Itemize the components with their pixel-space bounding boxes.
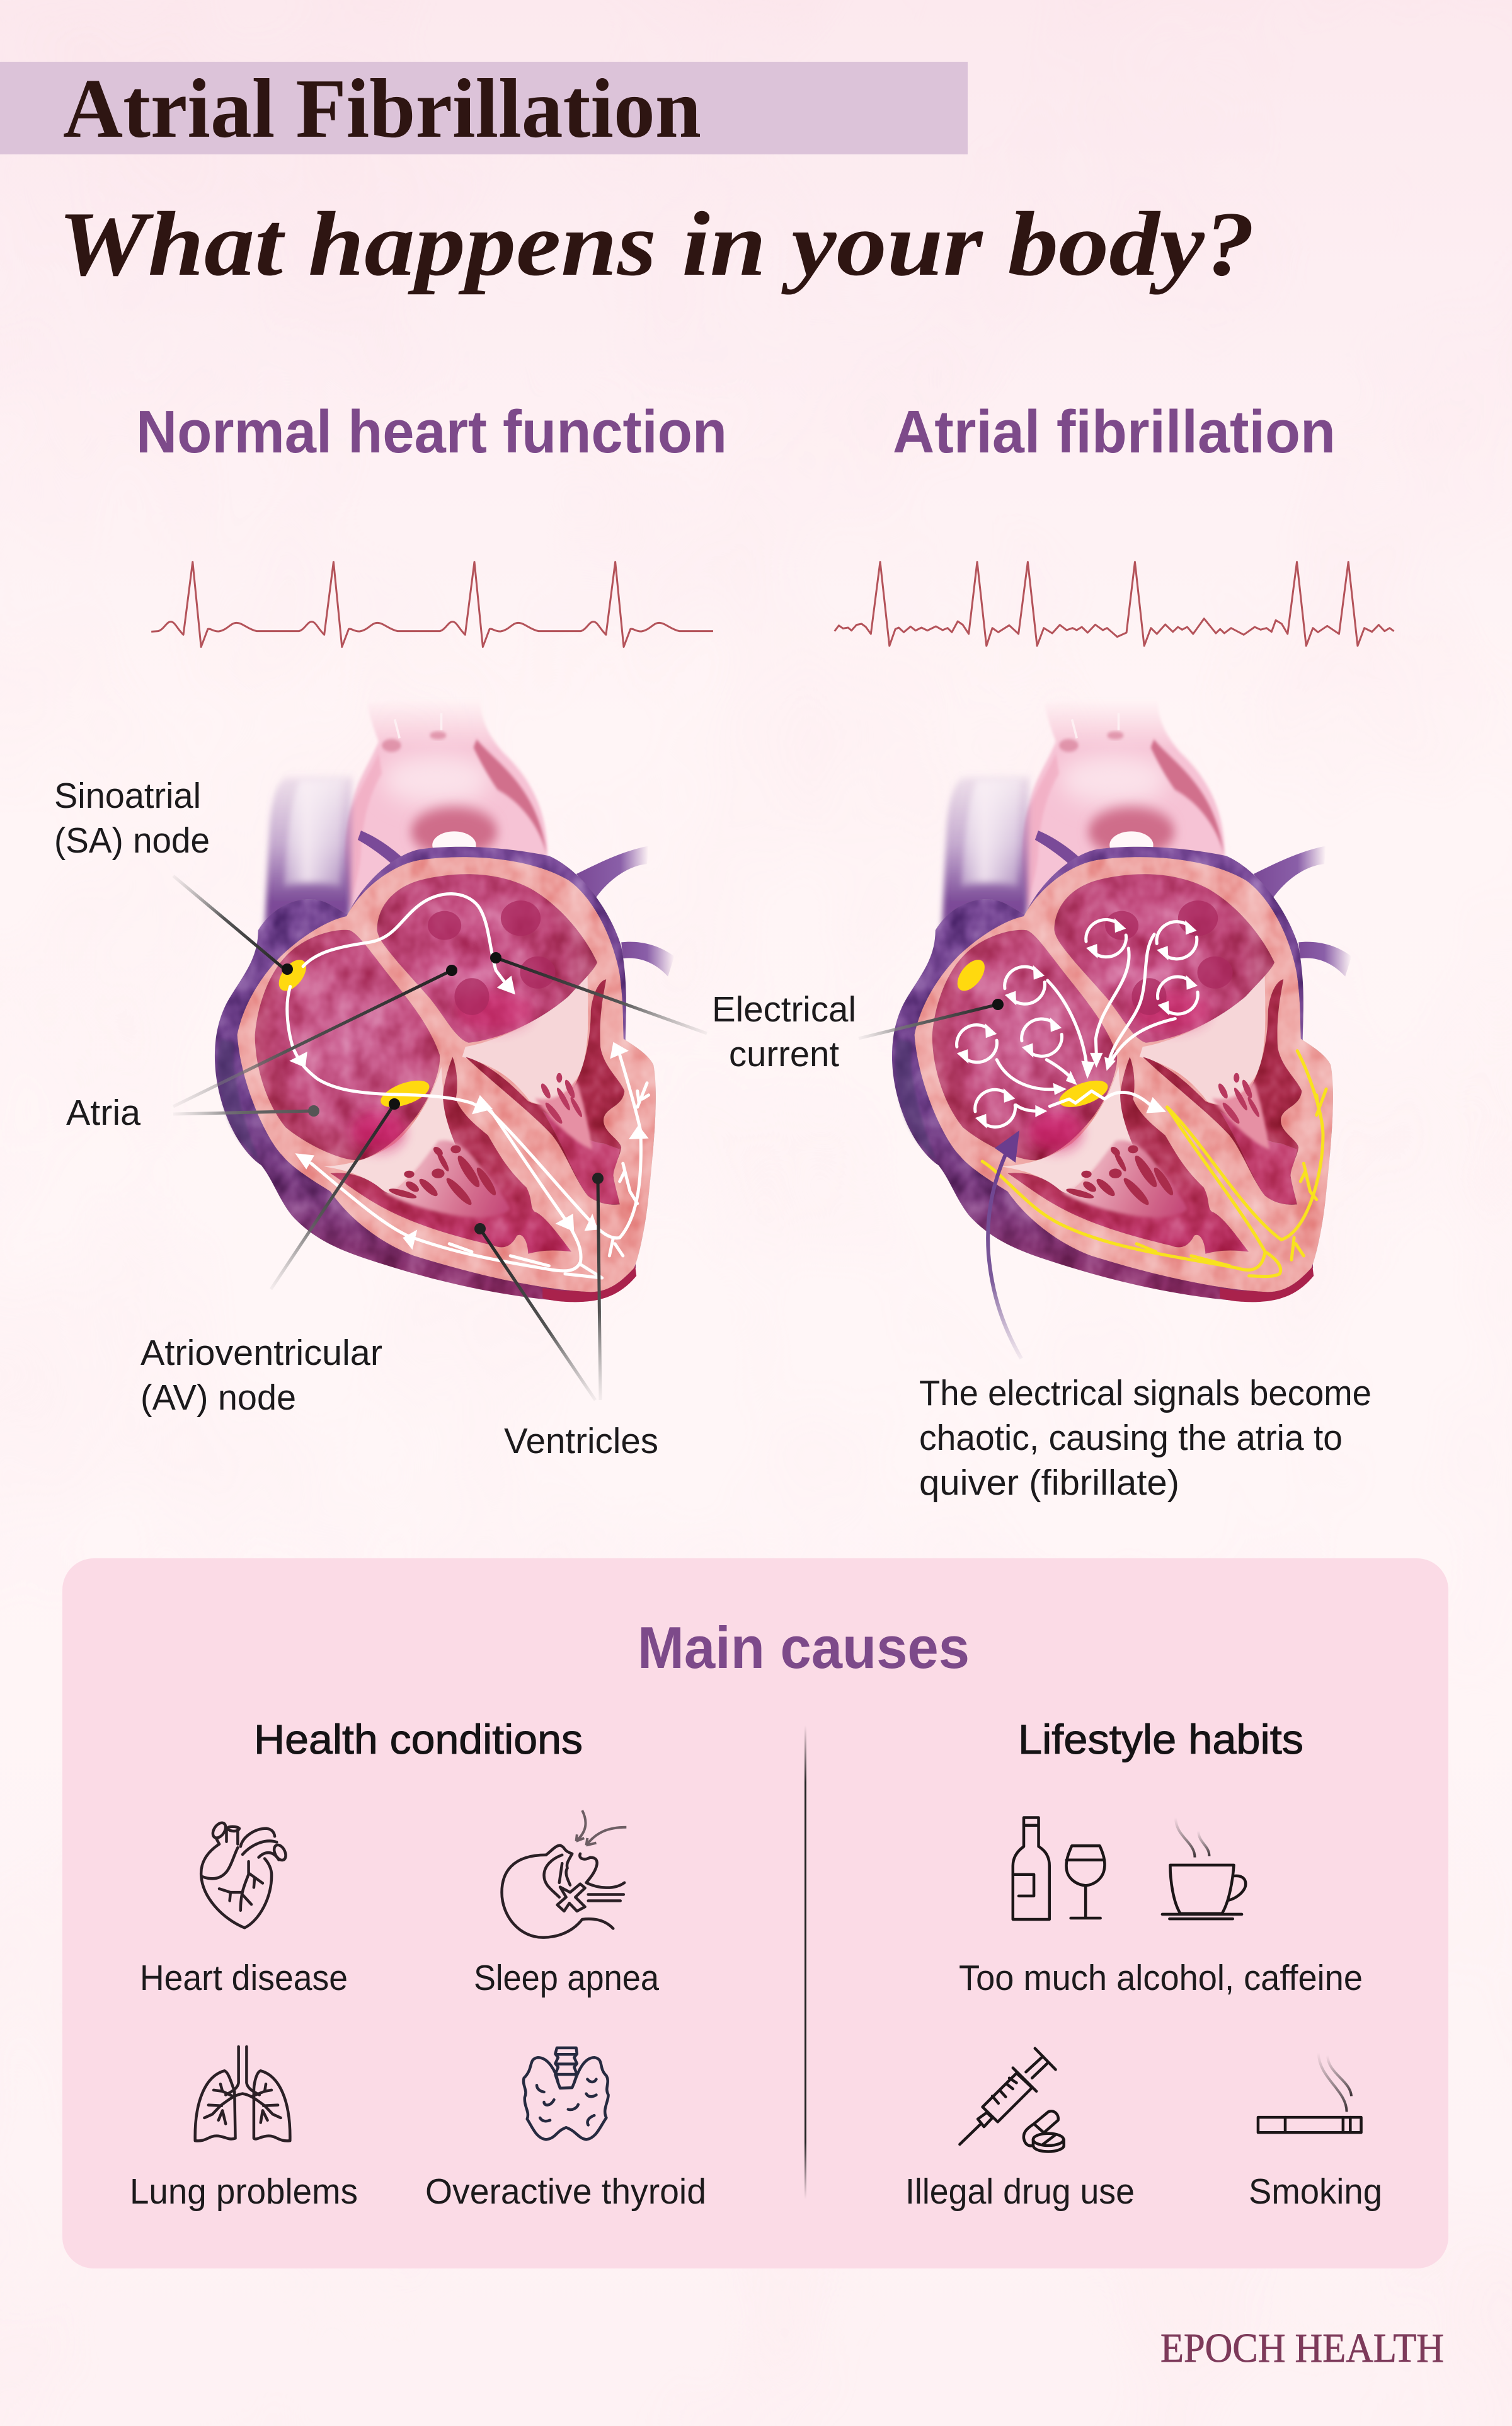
label: alcohol, caffeine: Too much alcohol, caffeine [959,1958,1363,1998]
purple callout arrow [988,1130,1021,1359]
callout text: chaotic, causing the atria to [919,1418,1343,1458]
icon: coffee cup [1162,1817,1246,1919]
label: SA node [54,776,210,861]
leader line: electrical current, fibrillation [859,999,1004,1038]
icon: sleep apnea [502,1810,626,1938]
icon: thyroid [524,2048,609,2139]
label: lung problems: Lung problems [130,2171,358,2212]
brand logo: EPOCH HEALTH [1160,2325,1444,2371]
callout text [919,1373,1372,1503]
panel: main causes [62,1558,1448,2268]
label: sleep apnea: Sleep apnea [474,1958,659,1998]
normal heart: electrical pathway [275,894,649,1278]
leader line: atria upper [173,965,457,1107]
heading: main causes: Main causes [638,1614,970,1681]
label: heart disease: Heart disease [140,1958,348,1998]
label: SA node: (SA) node [54,820,210,861]
label: ventricles: Ventricles [504,1421,658,1461]
label: smoking: Smoking [1249,2171,1382,2212]
callout text: quiver (fibrillate) [919,1463,1179,1503]
callout text: The electrical signals become [919,1373,1372,1413]
sub-heading: lifestyle habits: Lifestyle habits [1018,1716,1303,1762]
ECG: atrial fibrillation rhythm [835,562,1394,646]
icon: syringe and pills [959,2049,1064,2151]
leader line: ventricle right [592,1173,604,1400]
label: AV node [140,1333,382,1418]
fibrillating heart: chaotic signals [953,918,1326,1277]
heart illustration: atrial fibrillation [892,693,1351,1302]
title: Atrial Fibrillation [63,62,701,155]
leader line: atria lower [173,1105,319,1117]
label: SA node: Sinoatrial [54,776,201,816]
leader line: SA node [173,876,293,975]
label: electrical current: Electrical [712,989,856,1030]
leader line: AV node [271,1098,400,1289]
heading: normal heart function: Normal heart function [136,398,727,466]
icon: heart disease [201,1822,288,1928]
label: electrical current [712,989,856,1074]
title band [0,62,968,154]
leader line: electrical current [490,952,707,1033]
leader line: ventricle left [474,1223,595,1400]
icon: alcohol [1013,1817,1104,1919]
label: electrical current: current [729,1034,839,1074]
subtitle: What happens in your body? [58,193,1255,295]
label: illegal drug use: Illegal drug use [905,2171,1135,2212]
label: atria: Atria [66,1093,140,1133]
label: AV node: (AV) node [140,1377,296,1418]
icon: lungs [195,2047,290,2141]
heart illustration: normal [215,693,674,1302]
label: overactive thyroid: Overactive thyroid [425,2171,706,2212]
heading: atrial fibrillation: Atrial fibrillation [893,398,1336,466]
sub-heading: health conditions: Health conditions [254,1716,583,1762]
label: AV node: Atrioventricular [140,1333,382,1373]
ECG: normal rhythm [151,562,713,647]
icon: cigarette [1258,2053,1361,2132]
